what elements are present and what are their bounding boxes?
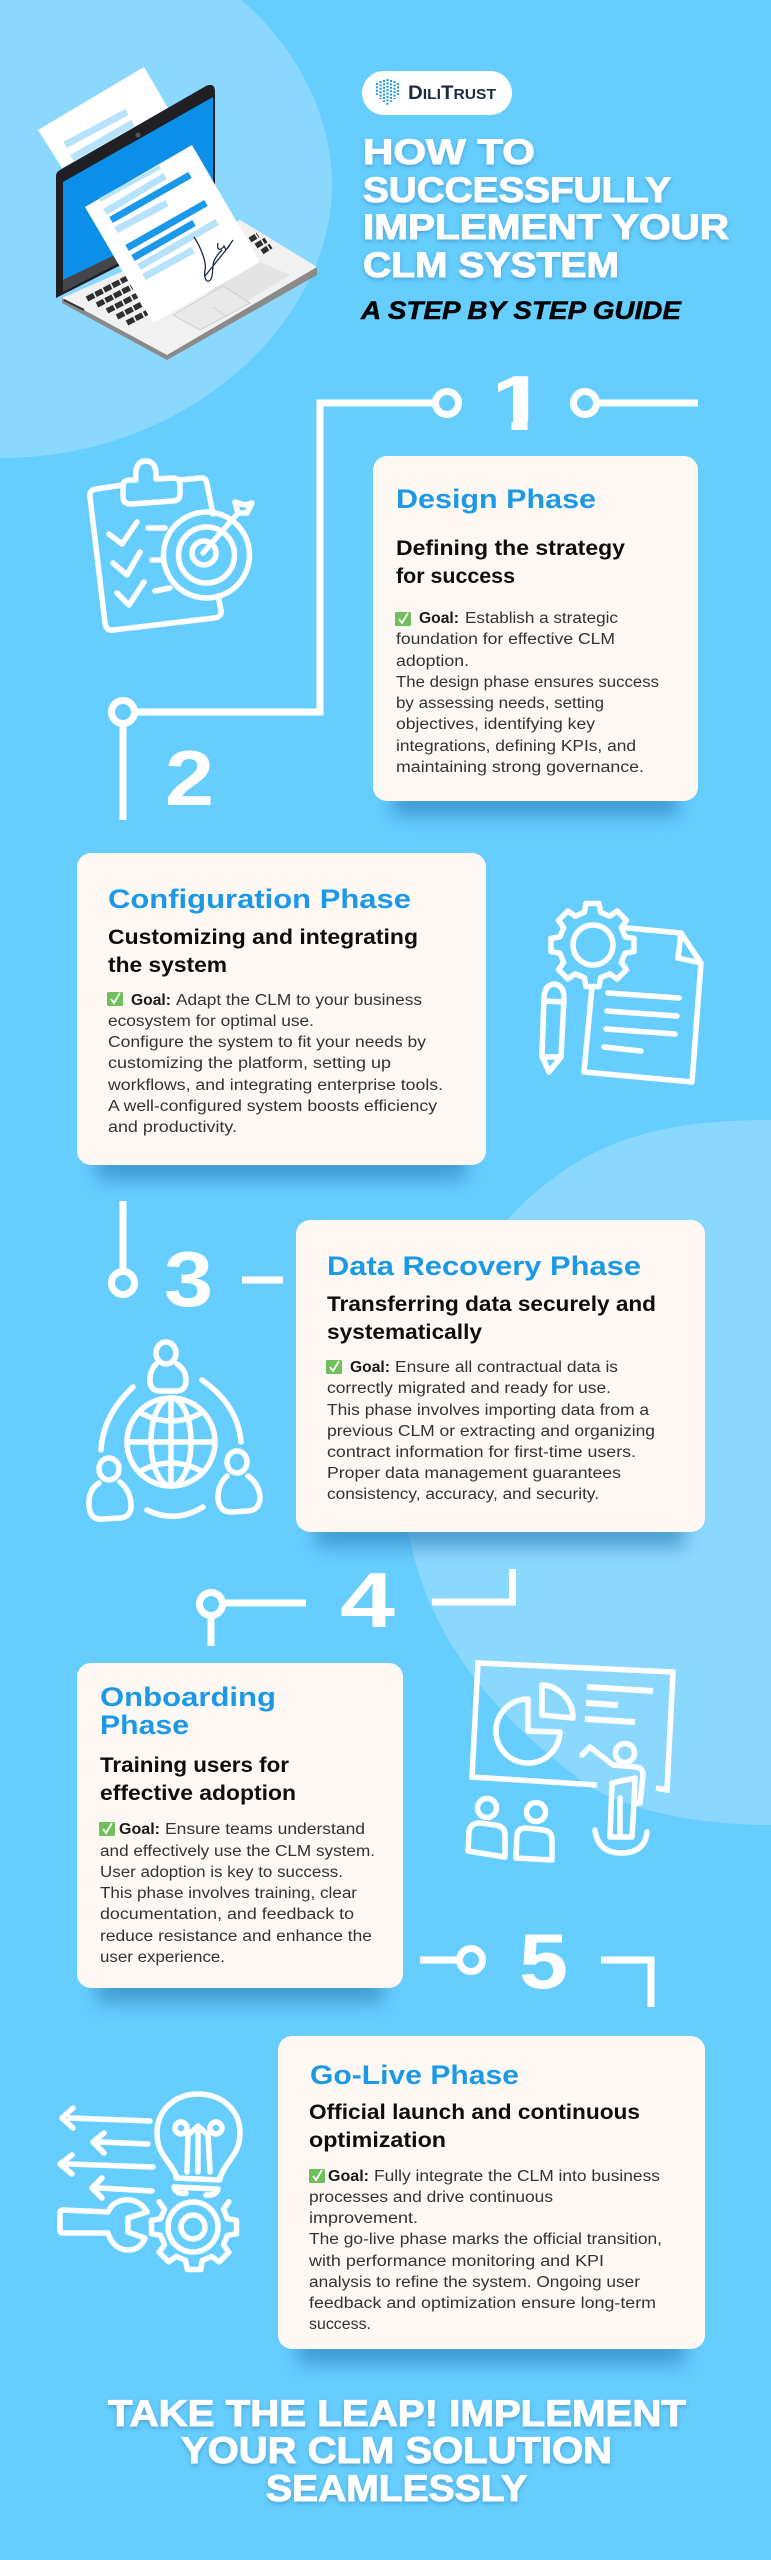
icon: clipboard with target (90, 461, 252, 630)
logo: DiliTrust pill (362, 71, 512, 115)
closing call to action: YOUR CLM SOLUTION (181, 2430, 612, 2471)
panel: go-live phase: improvement. (309, 2210, 418, 2227)
panel: go-live phase: Goal: (328, 2168, 369, 2185)
background shape: top left (0, 0, 332, 458)
panel: onboarding phase: user experience. (100, 1949, 225, 1966)
icon: presentation board with audience (468, 1663, 673, 1860)
panel: go-live phase: success. (309, 2316, 371, 2333)
panel: configuration phase: Goal: (131, 992, 171, 1009)
panel: data recovery phase: Ensure all contractual data is (395, 1359, 618, 1376)
panel: design phase: objectives, identifying key (396, 716, 595, 733)
panel: onboarding phase: reduce resistance and enhance the (100, 1928, 372, 1945)
step connector 3 to 4 (200, 1569, 512, 1646)
title: SUCCESSFULLY (363, 171, 671, 210)
panel: go-live phase: The go-live phase marks the official transition, (309, 2231, 662, 2248)
panel: configuration phase: Configuration Phase (108, 884, 411, 914)
panel: go-live phase: optimization (309, 2129, 446, 2152)
panel: go-live phase: analysis to refine the system. Ongoing user (309, 2274, 640, 2291)
closing call to action: SEAMLESSLY (266, 2468, 527, 2509)
panel: go-live phase (278, 2036, 705, 2364)
panel: go-live phase: processes and drive continuous (309, 2189, 553, 2206)
step number 1: 1 (488, 359, 548, 447)
panel: data recovery phase: Goal: (350, 1359, 390, 1376)
panel: data recovery phase: contract information for first-time users. (327, 1444, 636, 1461)
title: IMPLEMENT YOUR (363, 208, 729, 247)
panel: data recovery phase: This phase involves importing data from a (327, 1402, 649, 1419)
title: CLM SYSTEM (363, 246, 619, 285)
panel: design phase: maintaining strong governance. (396, 759, 644, 776)
panel: configuration phase: customizing the platform, setting up (108, 1055, 391, 1072)
background shape: right (403, 1120, 771, 1825)
title: HOW TO (363, 133, 535, 172)
panel: design phase: adoption. (396, 653, 469, 670)
step number 4: 4 (340, 1556, 395, 1644)
panel: configuration phase: Adapt the CLM to your business (176, 992, 422, 1009)
panel: onboarding phase: effective adoption (100, 1782, 296, 1805)
panel: configuration phase: ecosystem for optimal use. (108, 1013, 314, 1030)
panel: onboarding phase: documentation, and feedback to (100, 1906, 354, 1923)
panel: design phase (373, 456, 698, 816)
panel: data recovery phase: Data Recovery Phase (327, 1251, 641, 1281)
panel: go-live phase: feedback and optimization ensure long-term (309, 2295, 656, 2312)
panel: data recovery phase: previous CLM or extracting and organizing (327, 1423, 655, 1440)
panel: onboarding phase: User adoption is key to success. (100, 1864, 343, 1881)
panel: onboarding phase (77, 1663, 403, 2003)
panel: onboarding phase: Goal: (119, 1821, 160, 1838)
icon: light bulb, arrows, wrench and gear (60, 2094, 240, 2269)
panel: design phase: Design Phase (396, 484, 596, 514)
title (363, 133, 729, 285)
panel: design phase: for success (396, 565, 515, 588)
panel: data recovery phase: Transferring data securely and (327, 1293, 656, 1316)
panel: go-live phase: Fully integrate the CLM into business (374, 2168, 660, 2185)
logo: DiliTrust pill: DILITRUST (408, 83, 496, 104)
panel: go-live phase: with performance monitoring and KPI (308, 2253, 604, 2270)
panel: data recovery phase: systematically (327, 1321, 482, 1344)
panel: design phase: foundation for effective CLM (396, 631, 615, 648)
panel: design phase: Defining the strategy (396, 537, 625, 560)
panel: data recovery phase (296, 1220, 705, 1547)
illustration: laptop with signed document (38, 67, 317, 360)
panel: design phase: The design phase ensures success (396, 674, 659, 691)
panel: design phase: Goal: (419, 610, 459, 627)
icon: gear, document and pencil (542, 904, 701, 1082)
step number 5: 5 (519, 1917, 568, 2005)
step number 2: 2 (165, 734, 214, 822)
panel: configuration phase: the system (108, 954, 227, 977)
panel: onboarding phase: Onboarding (100, 1682, 276, 1712)
panel: configuration phase: Configure the system to fit your needs by (108, 1034, 426, 1051)
subtitle: A STEP BY STEP GUIDE (360, 297, 682, 325)
panel: data recovery phase: consistency, accuracy, and security. (327, 1486, 599, 1503)
step number 3: 3 (164, 1235, 213, 1323)
panel: design phase: Establish a strategic (465, 610, 618, 627)
closing call to action (108, 2393, 686, 2509)
closing call to action: TAKE THE LEAP! IMPLEMENT (108, 2393, 686, 2434)
icon: globe with people (89, 1342, 260, 1519)
panel: go-live phase: Go-Live Phase (310, 2060, 519, 2090)
step connector 1 to 2 (112, 392, 698, 820)
panel: configuration phase: workflows, and integrating enterprise tools. (107, 1077, 443, 1094)
panel: configuration phase (77, 853, 486, 1180)
panel: onboarding phase: Ensure teams understand (165, 1821, 365, 1838)
panel: go-live phase: Official launch and continuous (309, 2101, 640, 2124)
step connector 4 to 5 (420, 1948, 651, 2007)
panel: design phase: integrations, defining KPIs, and (396, 738, 636, 755)
panel: onboarding phase: and effectively use the CLM system. (100, 1843, 375, 1860)
panel: onboarding phase: Phase (100, 1710, 189, 1740)
panel: design phase: by assessing needs, setting (396, 695, 604, 712)
panel: onboarding phase: This phase involves training, clear (100, 1885, 357, 1902)
panel: data recovery phase: Proper data management guarantees (327, 1465, 621, 1482)
panel: onboarding phase: Training users for (100, 1754, 289, 1777)
panel: configuration phase: A well-configured system boosts efficiency (108, 1098, 437, 1115)
panel: configuration phase: Customizing and integrating (108, 926, 418, 949)
panel: data recovery phase: correctly migrated and ready for use. (327, 1380, 611, 1397)
panel: configuration phase: and productivity. (108, 1119, 237, 1136)
step connector 2 to 3 (112, 1201, 283, 1294)
